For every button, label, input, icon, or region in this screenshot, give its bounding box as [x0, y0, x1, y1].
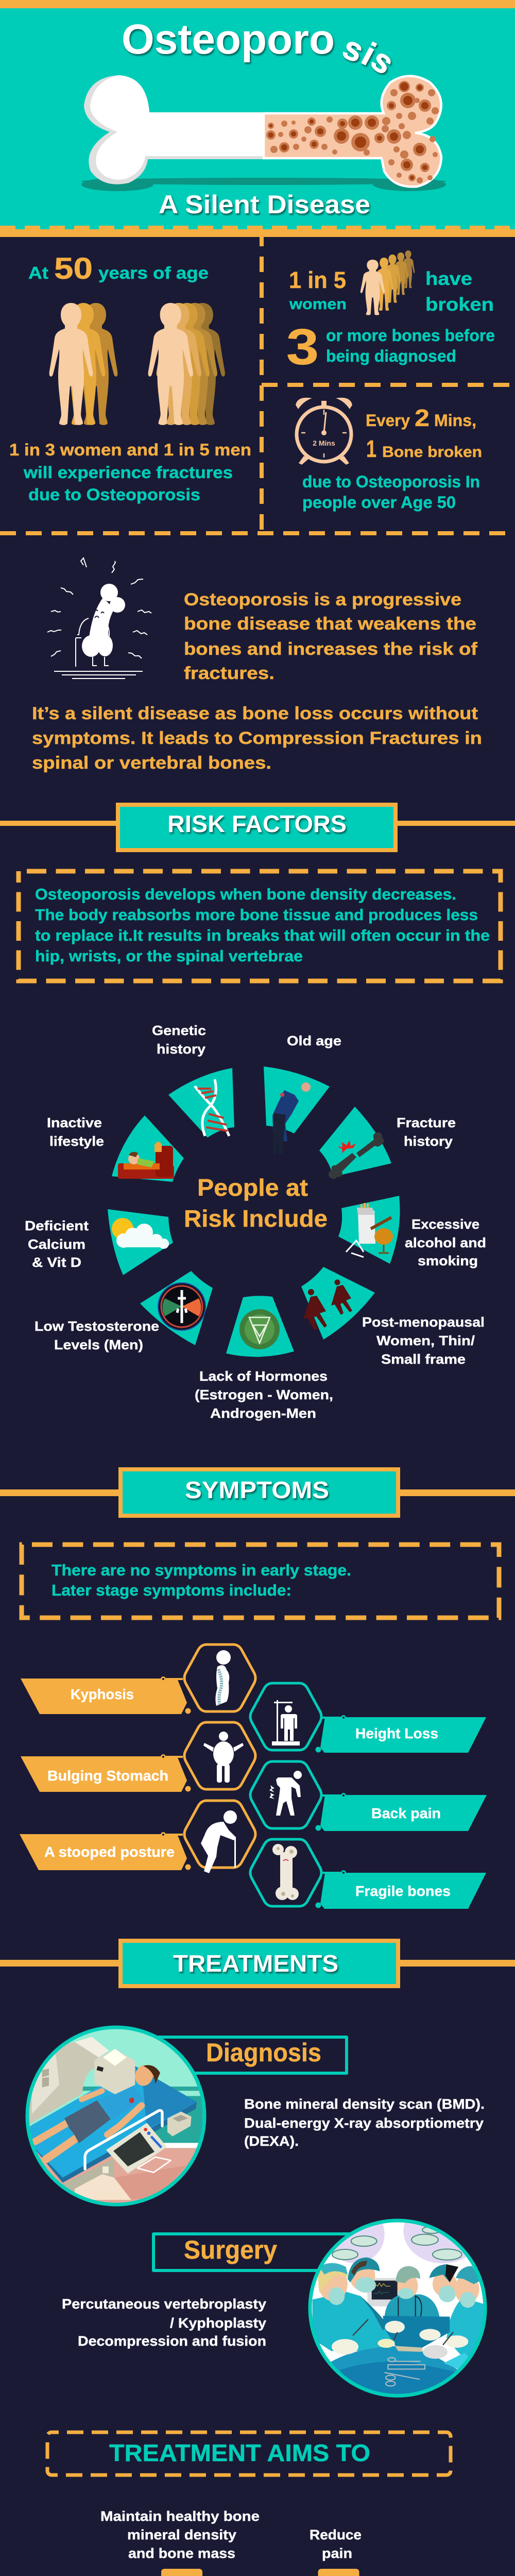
symptom: fragile bones	[250, 1839, 486, 1909]
icon: porous half of bone	[264, 76, 441, 187]
heading: a silent disease: A Silent Disease	[159, 190, 370, 219]
text: every 2 mins: 2	[415, 404, 430, 431]
text: surgery details: Percutaneous vertebroplasty	[62, 2296, 266, 2312]
heading: at 50 years of age: years of age	[98, 263, 209, 282]
icon: gold cross healthy bone	[127, 2569, 237, 2576]
labels: treatment aims upper: Maintain healthy bone	[100, 2509, 260, 2524]
labels: risk factors: lifestyle	[49, 1133, 104, 1149]
wedge: old age	[264, 1066, 330, 1154]
icon: gold cross lightning	[283, 2569, 393, 2576]
labels: treatment aims upper: Reduce	[310, 2527, 362, 2543]
heading: treatments	[0, 1941, 515, 1986]
wedge: genetic history	[168, 1068, 234, 1138]
text: disease description: It’s a silent disease as bone loss occurs without	[32, 704, 478, 723]
icon: bone shadow	[81, 178, 446, 191]
panel: risk factors description: to replace it.It results in breaks that will often occur in the	[35, 926, 490, 944]
labels: risk factors: alcohol and	[405, 1235, 486, 1250]
text: 1 in 5 women: 1 in 5	[289, 267, 346, 293]
wedge: low testosterone	[140, 1271, 213, 1345]
labels: risk factors: Women, Thin/	[376, 1333, 475, 1348]
labels: treatment aims upper: and bone mass	[128, 2546, 235, 2561]
symptom: stooped posture	[20, 1801, 255, 1873]
heading: risk factors: RISK FACTORS	[167, 810, 347, 837]
panel: hero header	[0, 0, 515, 237]
symptom: kyphosis	[21, 1645, 255, 1714]
labels: treatment aims upper: mineral density	[127, 2527, 236, 2543]
panel: symptoms intro: Later stage symptoms include:	[52, 1581, 291, 1599]
labels: risk factors: Genetic	[152, 1023, 206, 1038]
heading: symptoms: SYMPTOMS	[185, 1477, 329, 1503]
icon: alarm clock: 2 Mins	[313, 439, 335, 447]
labels: risk factors: (Estrogen - Women,	[195, 1387, 333, 1402]
text: have broken: broken	[425, 294, 494, 315]
text: disease description: bone disease that weakens the	[184, 614, 476, 634]
illustration: bone density scan	[23, 2025, 209, 2208]
panel: risk factors description: Osteoporosis develops when bone density decreases.	[35, 885, 456, 903]
symptom: bulging stomach	[21, 1722, 255, 1792]
panel: diagnosis box	[158, 2037, 347, 2073]
icon: men silhouettes	[148, 303, 225, 425]
symptom: bulging stomach: Bulging Stomach	[47, 1768, 168, 1784]
title	[122, 16, 401, 81]
labels: risk factors: Levels (Men)	[54, 1337, 143, 1352]
labels: risk factors: Lack of Hormones	[199, 1368, 328, 1384]
panel: symptoms intro	[22, 1545, 499, 1618]
text: have broken	[425, 268, 494, 315]
text: every 2 mins: Bone broken	[382, 444, 482, 461]
wedge: post-menopausal	[301, 1267, 375, 1340]
icon: alarm clock	[296, 398, 352, 465]
wedge: lack of hormones	[226, 1296, 294, 1357]
text: fracture statistics: will experience fractures	[23, 463, 233, 482]
text: 3 or more bones: being diagnosed	[326, 347, 456, 365]
text: surgery details	[62, 2296, 266, 2349]
labels: risk factors: Old age	[287, 1033, 341, 1048]
text: every 2 mins: Every	[366, 411, 410, 430]
text: diagnosis details: Dual-energy X-ray absorptiometry	[244, 2115, 484, 2131]
text: fracture statistics: due to Osteoporosis	[28, 485, 200, 504]
panel: symptoms intro: There are no symptoms in early stage.	[52, 1561, 351, 1579]
text: disease description: fractures.	[184, 664, 274, 683]
text: every 2 mins: Mins,	[434, 411, 476, 430]
labels: risk factors: & Vit D	[32, 1255, 81, 1270]
labels: treatment aims upper: pain	[322, 2546, 352, 2561]
title: Osteoporo	[122, 16, 335, 63]
labels: risk factors: history	[157, 1041, 206, 1057]
labels: risk factors: Fracture	[397, 1115, 456, 1130]
heading: treatments: TREATMENTS	[173, 1950, 338, 1977]
text: fracture statistics	[9, 440, 251, 504]
symptom: height loss: Height Loss	[355, 1725, 438, 1741]
text: every 2 mins	[302, 404, 482, 512]
text: surgery details: / Kyphoplasty	[170, 2315, 266, 2331]
wedge: vitamin d deficiency	[108, 1209, 173, 1275]
panel: risk factors description	[19, 871, 501, 981]
heading: treatment aims to	[47, 2432, 451, 2475]
illustration: surgery team	[308, 2218, 487, 2398]
labels: risk factors: Small frame	[381, 1351, 466, 1367]
symptom: fragile bones: Fragile bones	[355, 1883, 451, 1899]
heading: people at risk	[184, 1174, 328, 1232]
text: diagnosis details: Bone mineral density scan (BMD).	[244, 2096, 485, 2112]
text: surgery details: Decompression and fusion	[78, 2333, 266, 2349]
text: fracture statistics: 1 in 3 women and 1 in 5 men	[9, 440, 251, 459]
text: 3 or more bones: or more bones before	[326, 326, 495, 345]
icon: row of women	[360, 250, 415, 315]
text: every 2 mins: 1	[366, 435, 376, 462]
text: every 2 mins: people over Age 50	[302, 493, 456, 512]
labels: risk factors: smoking	[418, 1253, 478, 1268]
text: diagnosis details: (DEXA).	[244, 2133, 299, 2149]
heading: risk factors	[0, 805, 515, 850]
panel: diagnosis box: Diagnosis	[206, 2038, 321, 2067]
icon: healthy half of bone	[84, 75, 263, 184]
wedge: fracture history	[319, 1107, 391, 1179]
labels: risk factors: Excessive	[411, 1216, 479, 1232]
labels: risk factors: Inactive	[47, 1115, 102, 1130]
labels: risk factors	[25, 1023, 486, 1421]
symptom: stooped posture: A stooped posture	[44, 1844, 175, 1860]
heading: symptoms	[0, 1469, 515, 1516]
text: disease description: spinal or vertebral bones.	[32, 753, 271, 773]
panel: risk factors description: hip, wrists, or the spinal vertebrae	[35, 947, 303, 965]
symptom: kyphosis: Kyphosis	[71, 1686, 134, 1702]
heading: at 50 years of age: 50	[54, 252, 93, 285]
text: 3 or more bones: 3	[286, 318, 319, 375]
text: diagnosis details	[244, 2096, 485, 2149]
panel: risk factors description: The body reabsorbs more bone tissue and produces less	[35, 906, 478, 924]
labels: risk factors: history	[404, 1133, 453, 1149]
text: disease description: symptoms. It leads to Compression Fractures in	[32, 728, 482, 748]
icon: women silhouettes	[49, 303, 117, 425]
symptom: height loss	[250, 1683, 486, 1753]
heading: people at risk: Risk Include	[184, 1205, 328, 1232]
labels: risk factors: Deficient	[25, 1218, 89, 1233]
text: have broken: have	[425, 268, 472, 289]
text: every 2 mins: due to Osteoporosis In	[302, 472, 480, 491]
labels: treatment aims upper	[100, 2509, 362, 2561]
heading: treatment aims to: TREATMENT AIMS TO	[109, 2439, 370, 2466]
symptom: back pain	[250, 1761, 487, 1831]
chart: people at risk wheel	[25, 1023, 486, 1421]
labels: risk factors: Post-menopausal	[362, 1314, 485, 1330]
panel: surgery box	[153, 2234, 350, 2270]
wedge: alcohol and smoking	[338, 1196, 400, 1264]
title: i	[356, 36, 382, 73]
labels: risk factors: Low Testosterone	[35, 1318, 159, 1334]
title: s	[337, 28, 369, 70]
labels: risk factors: Calcium	[28, 1236, 85, 1252]
wedge: inactive lifestyle	[112, 1115, 184, 1182]
symptom: back pain: Back pain	[371, 1805, 441, 1821]
text: disease description	[32, 590, 482, 773]
text: 1 in 5 women: women	[289, 296, 347, 313]
text: disease description: bones and increases the risk of	[184, 639, 478, 659]
heading: at 50 years of age	[28, 252, 209, 285]
title: s	[365, 41, 401, 81]
icon: sad bone with cane	[47, 558, 151, 679]
stats dividers	[0, 237, 515, 533]
text: disease description: Osteoporosis is a progressive	[184, 590, 461, 609]
heading: at 50 years of age: At	[28, 263, 48, 282]
text: 3 or more bones	[286, 318, 495, 375]
text: 1 in 5 women	[289, 267, 347, 313]
heading: people at risk: People at	[197, 1174, 308, 1201]
panel: surgery box: Surgery	[184, 2235, 277, 2264]
labels: risk factors: Androgen-Men	[210, 1405, 316, 1421]
